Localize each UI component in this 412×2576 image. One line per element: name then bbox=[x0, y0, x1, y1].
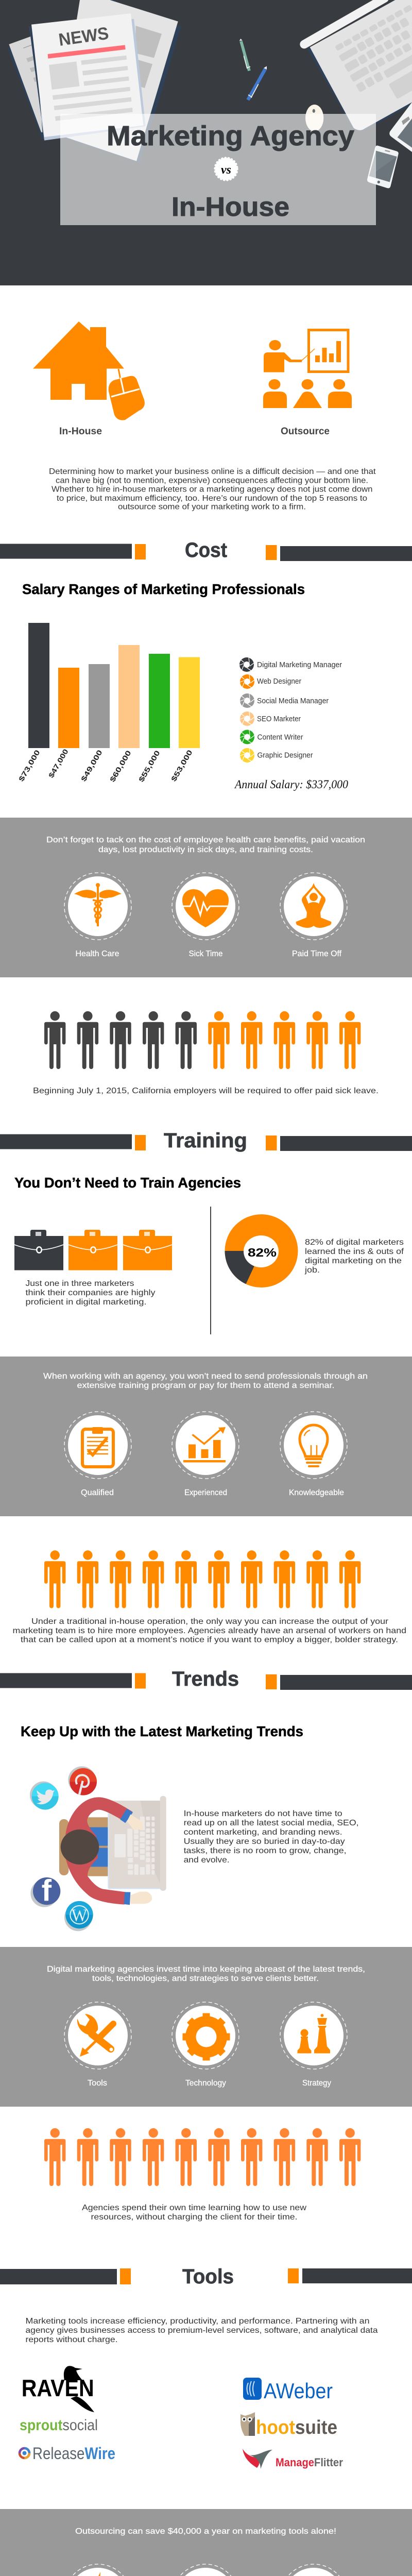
people row: light orange bbox=[44, 2128, 360, 2186]
intro text: to price, but maximum efficiency, too. Here’s our rundown of the top 5 reasons to bbox=[57, 494, 367, 503]
logo: ManageFlitter: ManageFlitter bbox=[276, 2456, 343, 2469]
section header: Trends bbox=[0, 1668, 412, 1690]
icon: twitter bbox=[30, 1782, 59, 1810]
title: In-House: In-House bbox=[171, 192, 289, 222]
donut chart: 82%: 82% bbox=[248, 1246, 277, 1259]
heading: train agencies: You Don’t Need to Train Agencies bbox=[14, 1175, 241, 1191]
bar chart: salaries: $49,000 bbox=[79, 748, 104, 783]
logo: hootsuite: hootsuite bbox=[256, 2417, 337, 2438]
panel: cost benefits band: days, lost productivity in sick days, and training costs. bbox=[98, 845, 313, 854]
bar chart: salaries: $73,000 bbox=[17, 748, 42, 783]
text: 82 percent: 82% of digital marketers bbox=[305, 1238, 404, 1247]
intro text: outsource some of your marketing work to a firm. bbox=[118, 503, 306, 511]
icon: lightning bolt bbox=[85, 2572, 113, 2576]
logo: AWeber bbox=[243, 2378, 333, 2403]
text: agencies spend time bbox=[82, 2204, 306, 2222]
icon: gear bbox=[182, 2013, 230, 2061]
panel: cost benefits band: Health Care bbox=[75, 950, 119, 958]
text: in-house marketers: read up on all the latest social media, SEO, bbox=[184, 1819, 359, 1827]
text: in-house marketers bbox=[184, 1809, 359, 1865]
donut chart: 82% bbox=[225, 1214, 298, 1287]
annual salary: Annual Salary: $337,000 bbox=[234, 778, 348, 791]
people row: orange bbox=[44, 1550, 360, 1608]
panel: trends band bbox=[0, 1947, 412, 2107]
section header: Cost: Cost bbox=[185, 539, 227, 562]
text: traditional in-house operation: marketing team is to hire more employees. Agencies already have an arsenal of workers on hand bbox=[12, 1626, 406, 1635]
panel: trends band: Digital marketing agencies invest time into keeping abreast of the latest trends, bbox=[47, 1965, 365, 1974]
logo: AWeber: AWeber bbox=[264, 2379, 333, 2403]
intro text: Whether to hire in-house marketers or a marketing agency does not just come down bbox=[52, 485, 373, 494]
intro text: can have big (not to mention, expensive) consequences affecting your bottom line. bbox=[56, 476, 368, 485]
text: one in three marketers: Just one in three marketers bbox=[26, 1279, 134, 1288]
icon: clipboard bbox=[82, 1427, 113, 1467]
bar chart: salaries: $55,000 bbox=[137, 749, 162, 783]
text: in-house marketers: Usually they are so buried in day-to-day bbox=[184, 1837, 345, 1846]
text: traditional in-house operation: Under a traditional in-house operation, the only way you can increase the output of your bbox=[31, 1617, 389, 1626]
icon: yoga bbox=[296, 883, 331, 928]
panel: trends band: Tools bbox=[88, 2079, 107, 2088]
text: in-house marketers: and evolve. bbox=[184, 1856, 230, 1865]
bar chart: salaries: $53,000 bbox=[169, 748, 194, 783]
legend: Web Designer bbox=[257, 677, 301, 686]
panel: trends band: tools, technologies, and strategies to serve clients better. bbox=[92, 1974, 319, 1983]
label: Outsource: Outsource bbox=[281, 426, 330, 437]
section header: Trends: Trends bbox=[172, 1668, 239, 1690]
text: one in three marketers: proficient in digital marketing. bbox=[26, 1298, 146, 1307]
text: agencies spend time: resources, without charging the client for their time. bbox=[91, 2213, 298, 2222]
text: marketing tools: reports without charge. bbox=[26, 2335, 117, 2344]
logo: sproutsocial: sproutsocial bbox=[20, 2417, 98, 2434]
logo: ReleaseWire: ReleaseWire bbox=[32, 2444, 115, 2463]
text: 82 percent: digital marketing on the bbox=[305, 1257, 402, 1265]
icon: heart bbox=[182, 889, 229, 927]
NEWS masthead: NEWS bbox=[57, 24, 110, 50]
legend: Social Media Manager bbox=[257, 697, 329, 705]
note: California sick leave: Beginning July 1, 2015, California employers will be required to offer paid sick leave. bbox=[33, 1087, 379, 1095]
panel: cost benefits band: Paid Time Off bbox=[292, 950, 342, 958]
text: 82 percent bbox=[304, 1238, 404, 1275]
text: in-house marketers: tasks, there is no room to grow, change, bbox=[184, 1846, 347, 1855]
intro text bbox=[49, 467, 376, 511]
text: marketing tools bbox=[26, 2317, 378, 2344]
panel: training band: extensive training program or pay for them to attend a seminar. bbox=[77, 1381, 335, 1390]
panel: training band: Qualified bbox=[81, 1488, 114, 1497]
intro text: Determining how to market your business online is a difficult decision — and one that bbox=[49, 467, 376, 476]
title: Marketing Agency: Marketing Agency bbox=[107, 121, 354, 151]
panel: training band bbox=[0, 1357, 412, 1516]
bar chart: salaries bbox=[17, 623, 200, 783]
pens bbox=[241, 41, 249, 71]
mouse bbox=[305, 105, 323, 131]
icon: tools bbox=[77, 2014, 113, 2057]
text: 82 percent: job. bbox=[304, 1266, 320, 1275]
illustration: newspapers bbox=[8, 0, 181, 163]
illustration: laptop, pens, mouse, phone and tablet bbox=[239, 0, 412, 188]
icon: wordpress bbox=[64, 1901, 93, 1931]
badge: vs bbox=[215, 158, 237, 180]
panel: training band: When working with an agency, you won’t need to send professionals through an bbox=[43, 1372, 368, 1381]
text: 82 percent: learned the ins & outs of bbox=[305, 1247, 404, 1256]
panel: trends band: Technology bbox=[185, 2079, 226, 2088]
section header: Tools bbox=[0, 2265, 412, 2288]
icon: light bulb bbox=[300, 1425, 328, 1466]
icon: pinterest bbox=[68, 1766, 97, 1795]
icon: facebook bbox=[30, 1874, 60, 1907]
title box bbox=[60, 114, 376, 225]
people row: half dark half orange bbox=[44, 1011, 360, 1069]
icon: outsource bbox=[263, 330, 352, 408]
text: agencies spend time: Agencies spend their own time learning how to use new bbox=[82, 2204, 306, 2212]
text: one in three marketers: think their companies are highly bbox=[26, 1289, 156, 1297]
logo: ManageFlitter bbox=[243, 2449, 343, 2469]
icon: facebook: f bbox=[42, 1874, 52, 1907]
text: in-house marketers: content marketing, and branding news. bbox=[184, 1828, 342, 1837]
icon: in-house bbox=[33, 321, 145, 420]
legend: Digital Marketing Manager bbox=[257, 660, 342, 669]
badge: vs: vs bbox=[221, 163, 231, 177]
legend: SEO Marketer bbox=[257, 715, 301, 723]
heading: keep up: Keep Up with the Latest Marketing Trends bbox=[21, 1723, 303, 1739]
section header: Training bbox=[0, 1129, 412, 1152]
panel: training band: Experienced bbox=[184, 1488, 227, 1497]
text: traditional in-house operation: that can be called upon at a moment’s notice if you want to employ a bigger, bolder strategy. bbox=[21, 1635, 398, 1645]
panel: training band: Knowledgeable bbox=[289, 1488, 344, 1497]
tablet bbox=[389, 102, 412, 152]
panel: cost benefits band bbox=[0, 818, 412, 977]
phone bbox=[367, 145, 399, 188]
icon: wordpress: W bbox=[72, 1906, 88, 1925]
panel: header bbox=[0, 0, 412, 285]
icon: chess pieces bbox=[298, 2014, 330, 2054]
text: in-house marketers: In-house marketers do not have time to bbox=[184, 1809, 342, 1818]
label: In-House: In-House bbox=[59, 426, 102, 437]
panel: cost benefits band: Sick Time bbox=[188, 950, 223, 958]
icon: growth chart bbox=[183, 1427, 226, 1462]
heading: salary ranges: Salary Ranges of Marketing Professionals bbox=[22, 581, 305, 597]
icon row: briefcases bbox=[14, 1230, 172, 1270]
text: traditional in-house operation bbox=[12, 1617, 406, 1645]
legend: Graphic Designer bbox=[258, 751, 313, 760]
bar chart: salaries: $47,000 bbox=[47, 748, 70, 779]
panel: tools band: Outsourcing can save $40,000 a year on marketing tools alone! bbox=[75, 2527, 336, 2536]
panel: trends band: Strategy bbox=[302, 2079, 331, 2088]
text: one in three marketers bbox=[26, 1279, 156, 1307]
logo: Raven bbox=[22, 2366, 94, 2412]
bar chart: salaries: $60,000 bbox=[108, 749, 133, 783]
illustration: marketer at laptop with social icons bbox=[30, 1766, 166, 1931]
logo: Raven: RAVEN bbox=[22, 2375, 94, 2401]
section header: Tools: Tools bbox=[182, 2265, 234, 2288]
icon: caduceus bbox=[74, 883, 122, 926]
panel: tools band bbox=[0, 2509, 412, 2576]
text: marketing tools: agency gives businesses access to premium-level services, software, and analytical data bbox=[26, 2326, 378, 2335]
legend: Content Writer bbox=[258, 733, 303, 742]
legend bbox=[239, 657, 342, 762]
panel: cost benefits band: Don’t forget to tack on the cost of employee health care benefits, paid vacation bbox=[46, 836, 365, 844]
text: marketing tools: Marketing tools increase efficiency, productivity, and performance. Partnering with an bbox=[26, 2317, 370, 2326]
section header: Cost bbox=[0, 539, 412, 562]
section header: Training: Training bbox=[164, 1129, 247, 1152]
logo: hootsuite bbox=[241, 2412, 337, 2438]
